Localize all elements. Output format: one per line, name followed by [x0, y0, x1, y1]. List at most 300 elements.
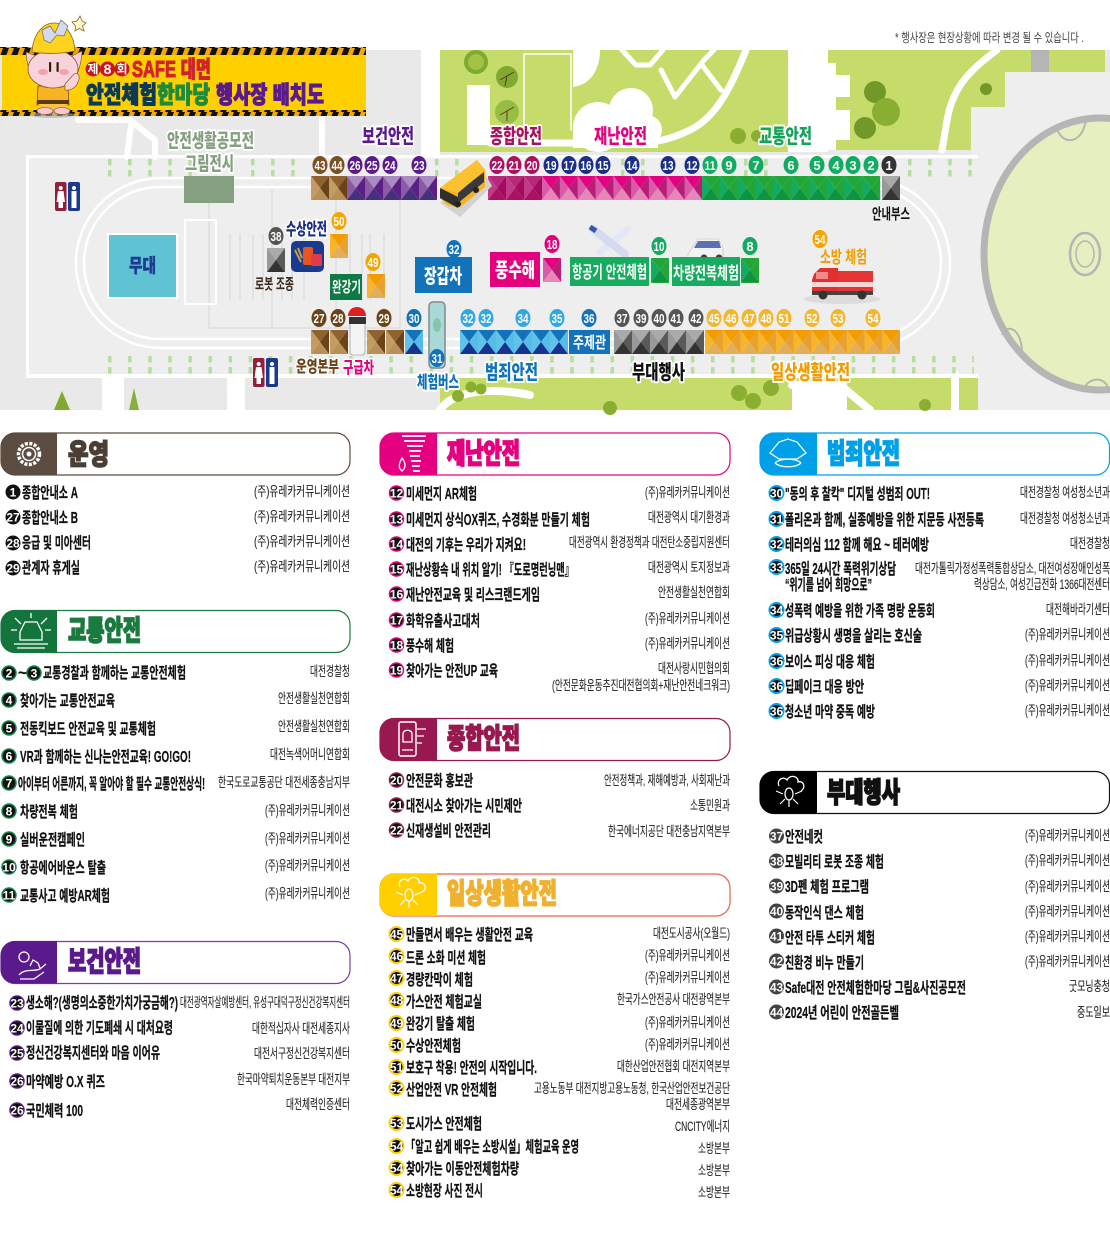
- item rows: (주)유레카커뮤니케이션: [254, 484, 350, 499]
- banner background: [2, 47, 366, 116]
- exhibit label and block: 그림전시: [185, 153, 234, 175]
- bottom badges: 41: [670, 311, 682, 326]
- top badges: 16: [580, 158, 592, 173]
- item rows: 한국도로교통공단 대전세종충남지부: [218, 775, 350, 790]
- bottom badges: 51: [778, 311, 790, 326]
- parking grid: [209, 190, 400, 328]
- theme hall booth: [569, 330, 610, 354]
- top badges: 2: [867, 158, 875, 173]
- trees: [54, 50, 992, 415]
- heading: 교통안전: [68, 615, 141, 646]
- item rows: (주)유레카커뮤니케이션: [645, 948, 730, 963]
- item rows: 딥페이크 대응 방안: [785, 678, 864, 696]
- item rows: 16: [390, 588, 403, 602]
- bottom badges: 40: [654, 311, 664, 326]
- item rows: [6, 484, 350, 577]
- item rows: 49: [390, 1016, 403, 1030]
- bottom badges: 47: [744, 311, 754, 326]
- item rows: 풍수해 체험: [406, 637, 454, 655]
- zone labels: 체험버스: [417, 373, 459, 392]
- orange booths: 49: [368, 255, 378, 270]
- water safety booth: [286, 220, 327, 272]
- top badges: 23: [414, 158, 424, 173]
- stadium: [984, 118, 1110, 390]
- stage: 무대: [129, 255, 156, 277]
- item rows: VR과 함께하는 신나는안전교육! GO!GO!: [20, 748, 191, 766]
- item rows: 안전문화 홍보관: [406, 772, 473, 790]
- water safety booth: 수상안전: [286, 220, 327, 239]
- item rows: 40: [770, 904, 783, 918]
- item rows: 대전도시공사(오월드): [653, 926, 730, 941]
- item rows: (주)유레카커뮤니케이션: [254, 534, 350, 549]
- exhibit label and block: 안전생활공모전: [167, 130, 254, 152]
- item rows: 10: [2, 860, 16, 874]
- armored car booth: 장갑차: [424, 265, 462, 288]
- item rows: 26: [10, 1104, 24, 1118]
- banner line one: 제: [87, 61, 99, 76]
- banner line one: [86, 56, 211, 82]
- info booth label: 안내부스: [872, 206, 910, 223]
- item rows: 한국에너지공단 대전충남지역본부: [608, 824, 730, 839]
- vehicle rollover booth: [672, 237, 759, 286]
- item rows: 2024년 어린이 안전골든벨: [785, 1004, 899, 1022]
- green dashes: [108, 159, 974, 375]
- robot control booth: [255, 227, 294, 293]
- item rows: 항공에어바운스 탈출: [20, 859, 106, 877]
- item rows: (주)유레카커뮤니케이션: [265, 831, 350, 846]
- item rows: 종합안내소 B: [22, 509, 78, 527]
- item rows: 이물질에 의한 기도폐쇄 시 대처요령: [26, 1019, 173, 1037]
- heading: [760, 432, 1110, 475]
- top booth strip: [311, 176, 900, 200]
- item rows: (주)유레카커뮤니케이션: [254, 509, 350, 524]
- right ground: [971, 72, 1110, 410]
- top badges: 43: [314, 158, 326, 173]
- item rows: (주)유레카커뮤니케이션: [265, 858, 350, 873]
- item rows: 모빌리티 로봇 조종 체험: [785, 853, 884, 871]
- item rows: 36: [770, 680, 783, 694]
- item rows: 안전네컷: [785, 828, 823, 846]
- top badges: 25: [366, 158, 378, 173]
- item rows: 5: [6, 722, 13, 736]
- panel: 교통안전: [0, 610, 350, 905]
- top badges: 21: [508, 158, 520, 173]
- descender booth: [330, 274, 362, 300]
- item rows: 34: [770, 604, 783, 618]
- robot control booth: 로봇 조종: [255, 276, 294, 293]
- racetrack lines: [76, 178, 950, 348]
- bottom badges: 34: [518, 311, 529, 326]
- item rows: 44: [770, 1006, 783, 1020]
- map: [0, 50, 1110, 415]
- item rows: 8: [6, 804, 13, 818]
- item rows: 41: [770, 930, 783, 944]
- bottom badges: 35: [552, 311, 562, 326]
- operations labels: [296, 358, 374, 377]
- item rows: 재난안전교육 및 리스크랜드게임: [406, 586, 540, 604]
- item rows: 성폭력 예방을 위한 가족 명랑 운동회: [785, 602, 935, 620]
- item rows: 51: [390, 1060, 403, 1074]
- top badges: 12: [686, 158, 698, 173]
- top badges: 44: [332, 158, 343, 173]
- item rows: 위급상황시 생명을 살리는 호신술: [785, 627, 922, 645]
- item rows: 미세먼지 AR체험: [406, 485, 477, 503]
- item rows: (주)유레카커뮤니케이션: [645, 1015, 730, 1030]
- item rows: (주)유레카커뮤니케이션: [645, 485, 730, 500]
- item rows: 2: [6, 666, 13, 680]
- bottom badges: 54: [868, 311, 879, 326]
- wind and flood booth: 18: [546, 237, 558, 252]
- heading: 보건안전: [68, 946, 141, 977]
- item rows: 청소년 마약 중독 예방: [785, 703, 875, 721]
- zone labels: 보건안전: [362, 125, 414, 148]
- item rows: 3: [31, 666, 38, 680]
- item rows: [770, 485, 1110, 721]
- item rows: 대전체력인증센터: [286, 1097, 350, 1112]
- panel: 운영: [0, 432, 350, 577]
- item rows: 32: [770, 538, 783, 552]
- item rows: 대전광역시 환경정책과 대전탄소중립지원센터: [569, 535, 730, 550]
- item rows: 대전광역시 대기환경과: [648, 510, 730, 525]
- item rows: 가스안전 체험교실: [406, 993, 482, 1011]
- item rows: 46: [390, 950, 403, 964]
- item rows: 대한적십자사 대전세종지사: [252, 1021, 350, 1036]
- item rows: [10, 994, 350, 1120]
- item rows: 17: [390, 614, 403, 628]
- bottom badges: 53: [832, 311, 844, 326]
- wind and flood booth: 풍수해: [495, 259, 535, 282]
- exhibit label and block: [167, 130, 254, 203]
- item rows: 경량칸막이 체험: [406, 971, 473, 989]
- item rows: 대전시소 찾아가는 시민제안: [406, 797, 522, 815]
- item rows: 소방본부: [698, 1185, 730, 1200]
- item rows: 안전생활실천연합회: [278, 719, 350, 734]
- item rows: 미세먼지 상식OX퀴즈, 수경화분 만들기 체험: [406, 511, 590, 529]
- banner line two: 행사장 배치도: [216, 82, 324, 109]
- bottom badges: 46: [726, 311, 736, 326]
- item rows: 39: [770, 880, 783, 894]
- orange booths: 50: [334, 214, 344, 229]
- item rows: (주)유레카커뮤니케이션: [265, 803, 350, 818]
- bottom badges: 48: [760, 311, 772, 326]
- item rows: 대전세종광역본부: [666, 1097, 730, 1112]
- item rows: 「알고 쉽게 배우는 소방시설」체험교육 운영: [406, 1138, 579, 1156]
- item rows: 국민체력 100: [26, 1102, 83, 1120]
- zone labels: [362, 125, 850, 392]
- item rows: 35: [770, 628, 783, 642]
- banner line one: 회: [116, 62, 128, 76]
- top badges: [312, 156, 896, 174]
- airplane booth: 10: [654, 239, 664, 254]
- item rows: 도시가스 안전체험: [406, 1115, 482, 1133]
- item rows: 재난상황속 내 위치 알기! 『도로명런닝맨』: [406, 561, 574, 579]
- top badges: 9: [725, 158, 733, 173]
- zone labels: 교통안전: [759, 125, 812, 148]
- item rows: 54: [390, 1184, 403, 1198]
- top badges: 19: [546, 158, 556, 173]
- zone labels: 일상생활안전: [771, 361, 850, 384]
- mascot: [26, 16, 86, 118]
- top badges: 6: [787, 158, 795, 173]
- panel: 종합안전: [380, 718, 730, 840]
- zone labels: 종합안전: [490, 125, 542, 148]
- item rows: 대전광역시 토지정보과: [648, 560, 730, 575]
- banner line two: [86, 82, 324, 109]
- bottom badges: 36: [584, 311, 594, 326]
- heading: [0, 610, 350, 653]
- top badges: 14: [626, 158, 638, 173]
- item rows: 47: [390, 972, 403, 986]
- heading: 일상생활안전: [447, 878, 557, 909]
- top badges: 22: [492, 158, 502, 173]
- panel: 재난안전: [380, 432, 730, 693]
- banner line two: 한마당: [157, 82, 210, 109]
- bottom booth strip: [311, 330, 900, 354]
- item rows: 9: [6, 832, 13, 846]
- item rows: 아이부터 어른까지, 꼭 알아야 할 필수 교통안전상식!: [18, 775, 205, 793]
- zone labels: 범죄안전: [485, 361, 538, 384]
- item rows: 7: [6, 776, 13, 790]
- item rows: 수상안전체험: [406, 1037, 461, 1055]
- park paths: [78, 50, 997, 410]
- wind and flood booth: [490, 235, 561, 287]
- item rows: 22: [390, 824, 403, 838]
- item rows: [769, 828, 1110, 1022]
- ambulance: [348, 307, 366, 355]
- item rows: 종합안내소 A: [22, 484, 78, 502]
- right park lawn: [828, 50, 1105, 150]
- item rows: 대전서구정신건강복지센터: [254, 1046, 350, 1061]
- top badges: 5: [813, 158, 821, 173]
- bottom badges: 39: [636, 311, 646, 326]
- item rows: 관계자 휴게실: [22, 559, 80, 577]
- robot control booth: 38: [270, 229, 282, 244]
- item rows: 대전사랑시민협의회: [658, 661, 730, 676]
- vehicle rollover booth: 8: [746, 239, 754, 254]
- hazard stripes: [0, 47, 366, 116]
- restroom icons bottom: [253, 358, 278, 387]
- item rows: 23: [10, 996, 24, 1010]
- item rows: Safe대전 안전체험한마당 그림&사진공모전: [785, 979, 966, 997]
- item rows: “위기를 넘어 희망으로”: [785, 576, 872, 594]
- item rows: 소통민원과: [690, 798, 730, 813]
- item rows: 20: [390, 774, 403, 788]
- restroom icons top: [55, 182, 80, 211]
- top badges: 15: [598, 158, 608, 173]
- item rows: 만들면서 배우는 생활안전 교육: [406, 926, 533, 944]
- top badges: 1: [885, 158, 893, 173]
- item rows: 54: [390, 1162, 403, 1176]
- item rows: 30: [770, 486, 783, 500]
- item rows: 찾아가는 이동안전체험차량: [406, 1160, 519, 1178]
- yellow bus: [440, 160, 492, 217]
- heading: [380, 718, 730, 761]
- item rows: 응급 및 미아센터: [22, 534, 91, 552]
- bottom badges: 32: [480, 311, 492, 326]
- item rows: 대전경찰청: [310, 664, 350, 679]
- fire truck booth: 소방 체험: [820, 248, 867, 267]
- item rows: CNCITY에너지: [675, 1119, 730, 1134]
- item rows: 한국마약퇴치운동본부 대전지부: [237, 1072, 350, 1087]
- stage apron: [185, 220, 216, 304]
- operations labels: 구급차: [343, 359, 374, 377]
- item rows: 폴리온과 함께, 실종예방을 위한 지문등 사전등록: [785, 511, 984, 529]
- bottom badges: 27: [314, 311, 324, 326]
- item rows: 45: [390, 928, 403, 942]
- item rows: 소방본부: [698, 1141, 730, 1156]
- item rows: (주)유레카커뮤니케이션: [645, 970, 730, 985]
- item rows: 안전생활실천연합회: [658, 585, 730, 600]
- item rows: 25: [10, 1046, 24, 1060]
- item rows: 11: [3, 888, 16, 902]
- item rows: [390, 926, 730, 1200]
- item rows: 보이스 피싱 대응 체험: [785, 653, 875, 671]
- theme hall booth: 주제관: [573, 334, 606, 352]
- heading: 범죄안전: [827, 438, 900, 469]
- experience bus: 31: [432, 351, 442, 366]
- bottom badges: 32: [462, 311, 474, 326]
- item rows: 26: [10, 1074, 24, 1088]
- item rows: 실버운전캠페인: [20, 831, 85, 849]
- item rows: 교통사고 예방AR체험: [20, 887, 110, 905]
- heading: [380, 432, 730, 475]
- item rows: [390, 485, 730, 693]
- item rows: [2, 664, 350, 905]
- top badges: 17: [564, 158, 574, 173]
- item rows: 한국가스안전공사 대전광역본부: [617, 992, 730, 1007]
- item rows: 정신건강복지센터와 마음 이어유: [26, 1044, 160, 1062]
- item rows: (주)유레카커뮤니케이션: [645, 636, 730, 651]
- item rows: 대전의 기후는 우리가 지켜요!: [406, 536, 526, 554]
- top badges: 3: [849, 158, 857, 173]
- item rows: 3D펜 체험 프로그램: [785, 878, 869, 896]
- item rows: 38: [770, 854, 783, 868]
- item rows: 대한산업안전협회 대전지역본부: [617, 1059, 730, 1074]
- zone labels: 부대행사: [632, 361, 685, 384]
- item rows: (주)유레카커뮤니케이션: [254, 559, 350, 574]
- heading: [380, 874, 730, 916]
- heading: [760, 771, 1110, 814]
- top badges: 20: [526, 158, 538, 173]
- icon: star: [72, 16, 86, 31]
- bottom badges: [312, 309, 880, 327]
- item rows: 찾아가는 안전UP 교육: [406, 662, 498, 680]
- item rows: 화학유출사고대처: [406, 612, 480, 630]
- armored car booth: [415, 240, 472, 293]
- fire truck booth: [804, 230, 880, 304]
- item rows: (주)유레카커뮤니케이션: [265, 886, 350, 901]
- bottom badges: 28: [332, 311, 344, 326]
- item rows: 고용노동부 대전지방고용노동청, 한국산업안전보건공단: [534, 1081, 730, 1096]
- top badges: 26: [350, 158, 360, 173]
- panel: 부대행사: [760, 771, 1110, 1022]
- armored car booth: 32: [448, 242, 460, 257]
- item rows: 24: [10, 1022, 24, 1036]
- panel: 보건안전: [0, 941, 350, 1120]
- item rows: 1: [10, 486, 17, 500]
- item rows: 안전정책과, 재해예방과, 사회재난과: [604, 773, 730, 788]
- item rows: 4: [6, 694, 13, 708]
- white road and blocks: [26, 50, 978, 410]
- heading: 재난안전: [447, 438, 520, 469]
- fire truck booth: 54: [814, 232, 826, 247]
- banner line one: SAFE 대면: [132, 56, 211, 82]
- banner line two: 안전체험: [86, 82, 157, 109]
- item rows: 13: [390, 512, 403, 526]
- item rows: 37: [770, 830, 783, 844]
- top badges: 4: [832, 158, 840, 173]
- panel: 일상생활안전: [380, 874, 730, 1200]
- item rows: 소방본부: [698, 1163, 730, 1178]
- item rows: 안전생활실천연합회: [278, 691, 350, 706]
- item rows: 산업안전 VR 안전체험: [406, 1081, 497, 1099]
- airplane booth: 항공기 안전체험: [572, 263, 647, 282]
- top badges: 7: [752, 158, 760, 173]
- panel: 범죄안전: [760, 432, 1110, 721]
- item rows: 42: [770, 954, 783, 968]
- top badges: 13: [662, 158, 674, 173]
- bottom badges: 37: [616, 311, 628, 326]
- item rows: 교통경찰과 함께하는 교통안전체험: [43, 664, 186, 682]
- item rows: 15: [390, 562, 403, 576]
- orange booths: [330, 212, 385, 298]
- zone labels: 재난안전: [594, 125, 647, 148]
- item rows: ~: [18, 665, 27, 682]
- item rows: 대전광역자살예방센터, 유성구대덕구정신건강복지센터: [180, 995, 350, 1010]
- item rows: 53: [390, 1116, 403, 1130]
- vehicle rollover booth: 차량전복체험: [673, 264, 739, 283]
- item rows: 29: [6, 562, 20, 576]
- heading: 운영: [68, 439, 109, 470]
- operations labels: 운영본부: [296, 358, 339, 376]
- bottom badges: 29: [378, 311, 390, 326]
- item rows: 21: [390, 798, 403, 812]
- item rows: 54: [390, 1140, 403, 1154]
- heading: [0, 432, 350, 475]
- item rows: 31: [770, 512, 783, 526]
- heading: [0, 941, 350, 984]
- item rows: 완강기 탈출 체험: [406, 1015, 475, 1033]
- item rows: 36: [770, 704, 783, 718]
- item rows: 친환경 비누 만들기: [785, 954, 864, 972]
- bottom park lawn: [440, 378, 978, 410]
- heading: 종합안전: [447, 723, 520, 754]
- item rows: 차량전복 체험: [20, 803, 78, 821]
- bottom badges: 52: [806, 311, 818, 326]
- plaza: [28, 157, 1110, 375]
- item rows: 신재생설비 안전관리: [406, 822, 491, 840]
- banner line one: 8: [104, 61, 112, 77]
- item rows: 보호구 착용! 안전의 시작입니다.: [406, 1059, 537, 1077]
- item rows: 52: [390, 1082, 403, 1096]
- bottom badges: 45: [708, 311, 720, 326]
- map ground: [0, 50, 1110, 410]
- top badges: 11: [704, 158, 716, 173]
- item rows: (주)유레카커뮤니케이션: [645, 1037, 730, 1052]
- item rows: 50: [390, 1038, 403, 1052]
- item rows: 마약예방 O.X 퀴즈: [26, 1073, 105, 1091]
- item rows: 14: [390, 538, 403, 552]
- stage: [108, 234, 177, 298]
- item rows: [390, 772, 730, 840]
- item rows: (안전문화운동추진대전협의회+재난안전네크워크): [552, 678, 730, 693]
- item rows: 18: [390, 638, 403, 652]
- airplane booth: [570, 227, 669, 286]
- item rows: 365일 24시간 폭력위기상담: [785, 560, 896, 578]
- item rows: 드론 소화 미션 체험: [406, 949, 486, 967]
- item rows: 27: [6, 510, 20, 524]
- item rows: 대전녹색어머니연합회: [270, 747, 350, 762]
